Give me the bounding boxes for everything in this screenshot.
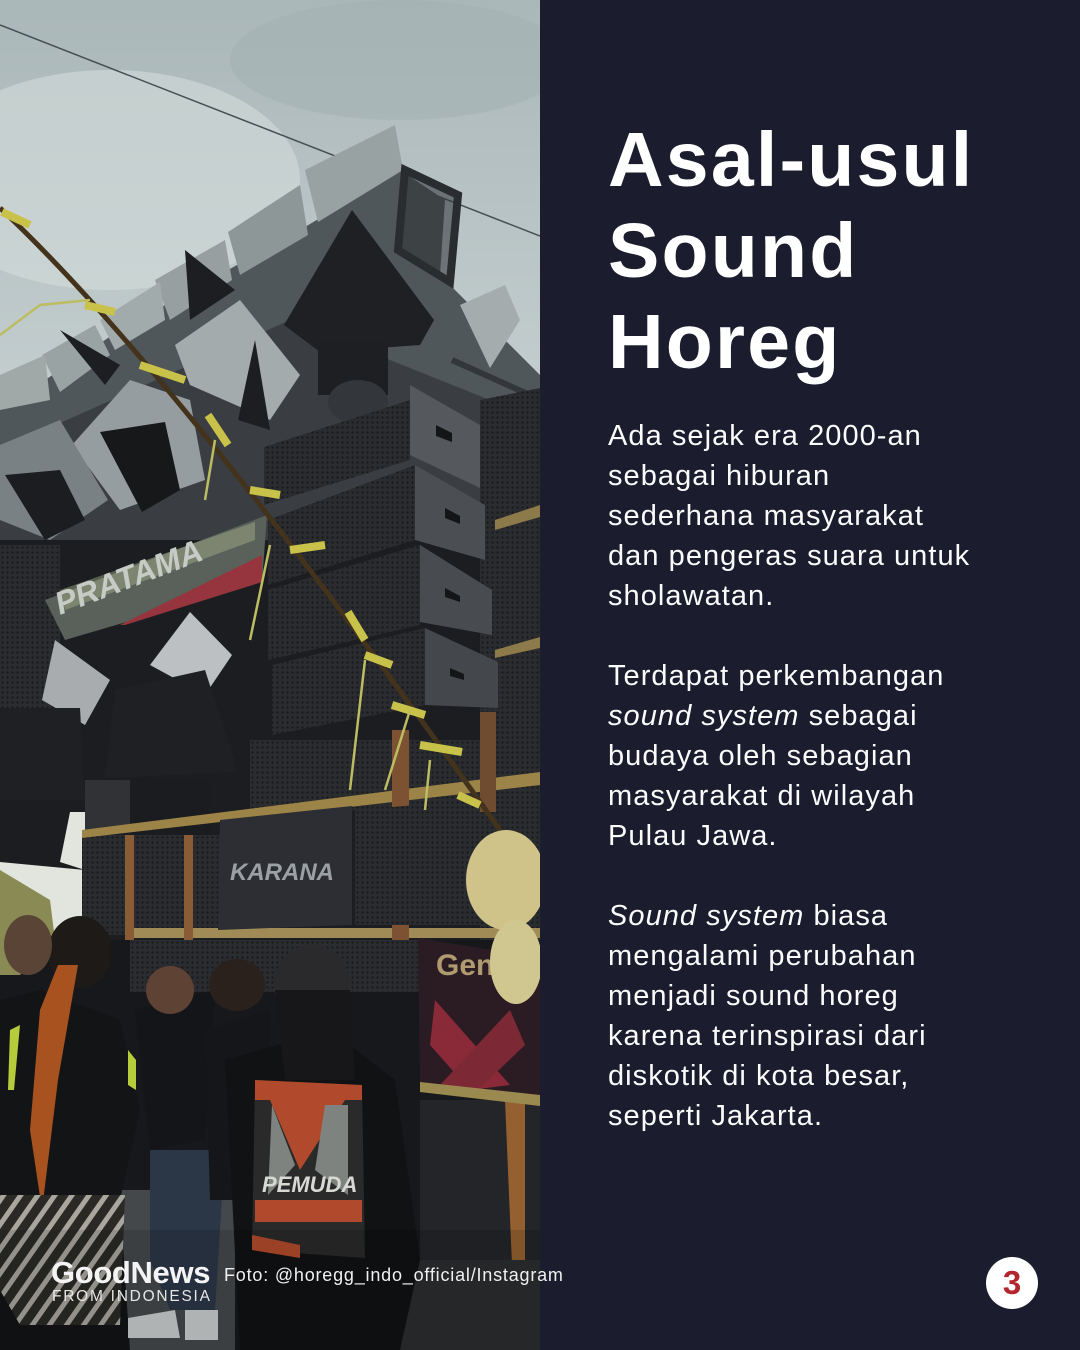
title: Sound (608, 208, 858, 294)
text block: paragraph 2: Terdapat perkembangan (608, 660, 944, 692)
logo: GoodNews from Indonesia: GoodNews (51, 1255, 210, 1290)
text block: paragraph 3: mengalami perubahan (608, 940, 917, 972)
text block: paragraph 1: sederhana masyarakat (608, 500, 924, 532)
silver-covered lights (0, 612, 238, 862)
lower speaker wall with shelves (0, 505, 540, 990)
text block: paragraph 3: seperti Jakarta. (608, 1100, 823, 1132)
text block: paragraph 3: karena terinspirasi dari (608, 1020, 927, 1052)
back print on shirt (252, 1080, 365, 1258)
sky (0, 0, 540, 900)
text block: paragraph 1: dan pengeras suara untuk (608, 540, 970, 572)
text block: paragraph 1: sebagai hiburan (608, 460, 830, 492)
banner: Karana (218, 806, 352, 930)
title (608, 117, 974, 385)
text block: paragraph 2: budaya oleh sebagian (608, 740, 913, 772)
text block: paragraph 2: sound system sebagai (608, 700, 918, 732)
title: Horeg (608, 299, 841, 385)
logo: GoodNews from Indonesia (51, 1255, 212, 1305)
photo: sound system stack with crowd (0, 0, 540, 1350)
banner: Pratama Audio (45, 515, 267, 640)
logo: GoodNews from Indonesia: FROM INDONESIA (52, 1288, 212, 1305)
truss and lights at the top (0, 125, 540, 560)
palm decoration (0, 208, 546, 1004)
page number badge: 3 (1003, 1264, 1021, 1301)
text block: paragraph 1 (608, 420, 970, 612)
text block: paragraph 3: Sound system biasa (608, 900, 888, 932)
back print on shirt: PEMUDA (262, 1172, 357, 1197)
banner: Pratama Audio: PRATAMA (50, 532, 207, 622)
line array speakers (0, 385, 540, 1250)
photo credit: Foto: @horegg_indo_official/Instagram (224, 1265, 564, 1285)
large hooded light (284, 210, 434, 352)
banner: Genk: Genk (436, 949, 511, 982)
text block: paragraph 2: masyarakat di wilayah (608, 780, 915, 812)
text block: paragraph 3 (608, 900, 927, 1132)
banner: Karana: KARANA (230, 859, 334, 886)
banner: Genk (0, 870, 540, 1350)
text block: paragraph 2 (608, 660, 944, 852)
text block: paragraph 3: menjadi sound horeg (608, 980, 899, 1012)
title: Asal-usul (608, 117, 974, 203)
text block: paragraph 2: Pulau Jawa. (608, 820, 778, 852)
panel: dark text background (540, 0, 1080, 1350)
text block: paragraph 1: sholawatan. (608, 580, 774, 612)
text block: paragraph 3: diskotik di kota besar, (608, 1060, 909, 1092)
crowd (0, 915, 420, 1350)
text block: paragraph 1: Ada sejak era 2000-an (608, 420, 922, 452)
page number badge (986, 1257, 1038, 1309)
batik sarong (0, 1195, 125, 1325)
